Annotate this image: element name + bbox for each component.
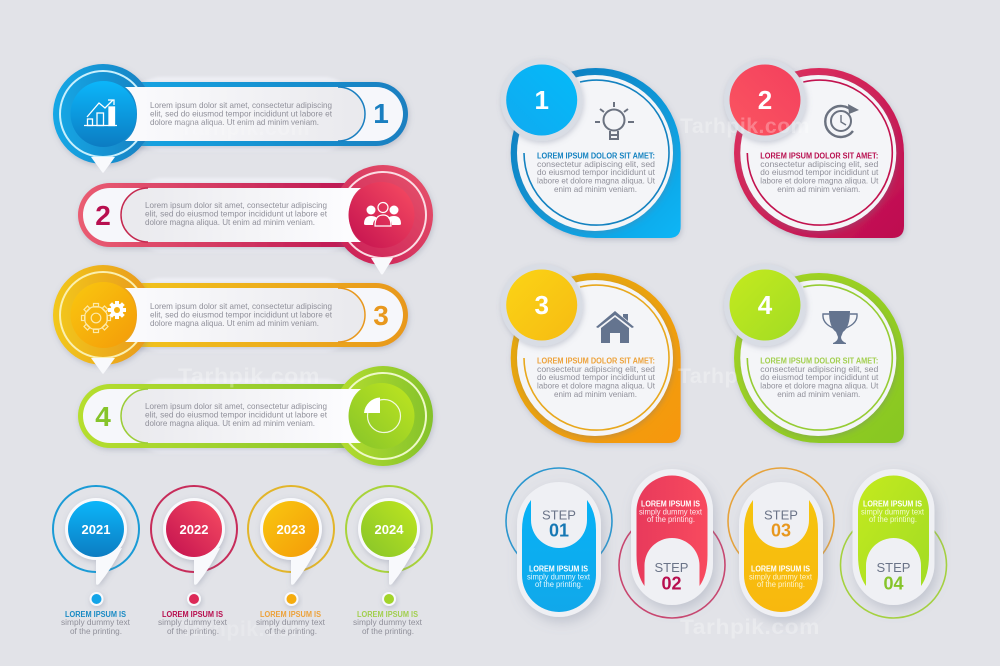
banner 2: pink: dolore magna aliqua. Ut enim ad minim veniam. [145,217,315,227]
step 01: 01 [549,520,569,540]
watermarks: Tarhpik.com [680,115,810,138]
step 04: of the printing. [869,515,917,524]
step 01: STEP [542,508,576,522]
step 03: of the printing. [757,580,805,589]
panel 1 text: enim ad minim veniam. [554,184,637,194]
banner 4 number: 4 [95,401,111,432]
panel 4 text [760,356,879,399]
banner 2: pink: elit, sed do eiusmod tempor incididunt ut labore et [145,208,328,218]
timeline 2022 [151,486,237,636]
banner 4 text: Lorem ipsum dolor sit amet, consectetur adipiscing [145,401,327,411]
step 02: STEP [655,560,688,575]
panel 4 text: LOREM IPSUM DOLOR SIT AMET: [760,356,878,366]
panel 1: blue: 1 [534,85,549,115]
step 03 [728,468,834,617]
banner 3: yellow: dolore magna aliqua. Ut enim ad minim veniam. [150,318,319,328]
panel 3 text: consectetur adipiscing elit, sed [537,364,655,374]
timeline 2021: of the printing. [70,627,122,636]
timeline 2024: simply dummy text [353,618,423,627]
icon: house [596,311,634,343]
timeline 2024: of the printing. [362,627,414,636]
step 04: STEP [877,560,910,575]
icon: growth chart [84,100,117,126]
timeline 2021: 2021 [82,522,110,537]
step 02: 02 [661,574,682,594]
panel 4 text: consectetur adipiscing elit, sed [760,364,879,374]
timeline 2024: 2024 [375,522,404,537]
banner 4: green [78,366,433,466]
step 04: 04 [883,574,904,594]
timeline 2022: 2022 [180,522,208,537]
watermarks: Tarhpik.com [180,618,310,641]
panel 3: yellow [501,264,681,443]
banner 3 number: 3 [373,300,389,331]
timeline 2023: simply dummy text [256,618,326,627]
step 03: 03 [771,520,791,540]
step 01: simply dummy text [527,572,591,582]
panel 2: pink: 2 [758,85,772,115]
panel 1: blue [501,59,681,238]
step 01: of the printing. [535,580,583,589]
panel 2: pink [724,59,904,238]
banner 4: green: elit, sed do eiusmod tempor incididunt ut labore et [145,410,328,420]
banner 3: yellow: elit, sed do eiusmod tempor incididunt ut labore et [150,310,333,320]
timeline 2022: LOREM IPSUM IS [162,610,223,619]
step 03: STEP [764,508,798,522]
panel 3 text: labore et dolore magna aliqua. Ut [537,380,656,390]
timeline 2024: LOREM IPSUM IS [357,610,418,619]
panel 1 text: consectetur adipiscing elit, sed [537,159,655,169]
banner 4: green: dolore magna aliqua. Ut enim ad minim veniam. [145,418,315,428]
panel 4 text: labore et dolore magna aliqua. Ut [760,380,879,390]
banner 2: pink [78,165,433,274]
step 01 [506,468,612,617]
panel 3 text: do eiusmod tempor incididunt ut [537,372,656,382]
panel 3 text [537,356,656,399]
icon: pie chart [364,398,400,432]
panel 1 text [537,152,656,194]
panel 3 text: LOREM IPSUM DOLOR SIT AMET: [537,356,655,366]
step 02: LOREM IPSUM IS [641,500,700,508]
icon: clock [825,104,859,137]
banner 1 text: Lorem ipsum dolor sit amet, consectetur adipiscing [150,100,332,110]
icon: gears [82,301,126,332]
timeline 2023 [248,486,334,636]
step 02 [619,469,725,618]
panel 2 text: enim ad minim veniam. [777,184,860,194]
panel 4 text: do eiusmod tempor incididunt ut [760,372,879,382]
panel 4 text: enim ad minim veniam. [777,389,860,399]
panel 4: green [724,264,904,443]
banner 2 text: Lorem ipsum dolor sit amet, consectetur adipiscing [145,200,327,210]
banner 2 number: 2 [95,200,111,231]
timeline 2022: of the printing. [167,627,219,636]
panel 3 text: enim ad minim veniam. [554,389,637,399]
step 04: simply dummy text [861,508,925,516]
step 03: LOREM IPSUM IS [751,564,810,574]
timeline 2023: of the printing. [265,627,317,636]
banner 1: blue: elit, sed do eiusmod tempor incididunt ut labore et [150,108,333,118]
step 03: simply dummy text [749,572,813,582]
panel 2 text: LOREM IPSUM DOLOR SIT AMET: [760,152,878,160]
timeline 2021 [53,486,139,636]
step 04 [840,469,946,618]
step 04: LOREM IPSUM IS [863,500,922,508]
panel 1 text: LOREM IPSUM DOLOR SIT AMET: [537,152,655,160]
banner 1: blue: dolore magna aliqua. Ut enim ad minim veniam. [150,117,319,127]
timeline 2022: simply dummy text [158,618,228,627]
panel 2 text [760,152,879,194]
timeline 2021: LOREM IPSUM IS [65,610,126,619]
panel 2 text: do eiusmod tempor incididunt ut [760,167,879,177]
panel 2 text: consectetur adipiscing elit, sed [760,159,879,169]
step 02: of the printing. [647,515,695,524]
panel 1 text: labore et dolore magna aliqua. Ut [537,176,656,186]
timeline 2024 [346,486,432,636]
timeline 2023: LOREM IPSUM IS [260,610,321,619]
timeline 2021: simply dummy text [61,618,131,627]
icon: team [364,202,401,226]
banner 3 text: Lorem ipsum dolor sit amet, consectetur adipiscing [150,301,332,311]
watermarks: Tarhpik.com [180,117,310,140]
panel 3: yellow: 3 [534,290,549,320]
panel 4: green: 4 [758,290,773,320]
banner 1: blue [53,64,408,173]
panel 1 text: do eiusmod tempor incididunt ut [537,167,656,177]
timeline 2023: 2023 [277,522,305,537]
watermarks: Tarhpik.com [178,365,320,388]
step 02: simply dummy text [639,508,703,516]
watermarks: Tarhp [678,365,738,388]
icon: trophy [823,311,857,344]
watermarks [178,115,820,641]
banner 3: yellow [53,265,408,374]
panel 2 text: labore et dolore magna aliqua. Ut [760,176,879,186]
icon: light bulb [595,102,634,139]
banner 1 number: 1 [373,98,389,129]
watermarks: Tarhpik.com [680,616,820,639]
step 01: LOREM IPSUM IS [529,564,588,574]
